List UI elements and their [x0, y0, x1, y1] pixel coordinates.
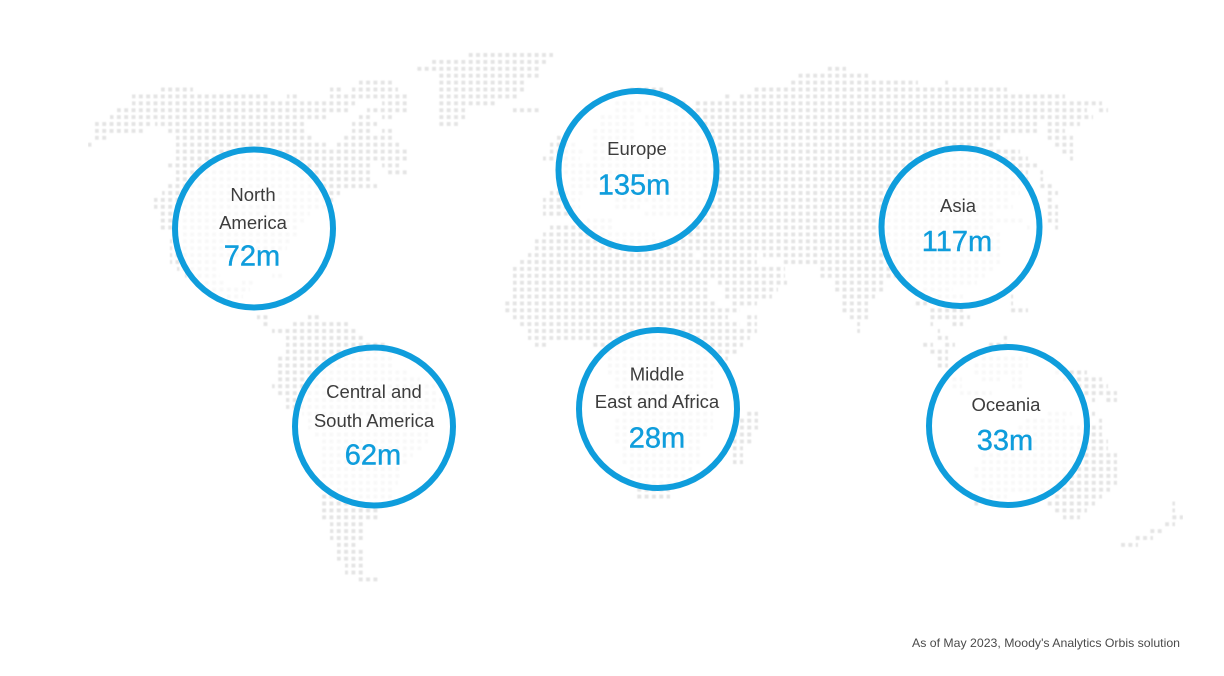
panel: Central and South America — [295, 348, 453, 506]
ring: Asia — [882, 148, 1040, 306]
ring: Europe — [558, 91, 716, 249]
ring: North America — [175, 150, 333, 308]
label: North America: America — [219, 212, 288, 233]
panel: Europe — [558, 91, 716, 249]
panel: Oceania — [929, 347, 1087, 505]
ring: Central and South America — [295, 348, 453, 506]
value: 117m: 117m — [922, 226, 992, 258]
value: 28m: 28m — [629, 422, 685, 454]
label: Europe: Europe — [607, 138, 667, 159]
label: Central and South America: South America — [314, 410, 435, 431]
value: 33m: 33m — [977, 425, 1033, 457]
label: Asia: Asia — [940, 195, 977, 216]
value: 135m: 135m — [598, 170, 670, 202]
label: Oceania: Oceania — [972, 394, 1041, 415]
label: Middle East and Africa: East and Africa — [595, 391, 720, 412]
dotted world map — [88, 52, 1183, 583]
panel: North America — [175, 150, 333, 308]
label: Middle East and Africa: Middle — [630, 364, 684, 384]
value: 72m: 72m — [224, 240, 280, 272]
label: North America: North — [230, 184, 276, 205]
panel: Asia — [882, 148, 1040, 306]
ring: Oceania — [929, 347, 1087, 505]
ring: Middle East and Africa — [579, 330, 737, 488]
panel: Middle East and Africa — [579, 330, 737, 488]
value: 62m: 62m — [345, 440, 401, 472]
label: Central and South America: Central and — [326, 381, 422, 402]
source note: As of May 2023, Moody's Analytics Orbis solution — [912, 636, 1180, 650]
